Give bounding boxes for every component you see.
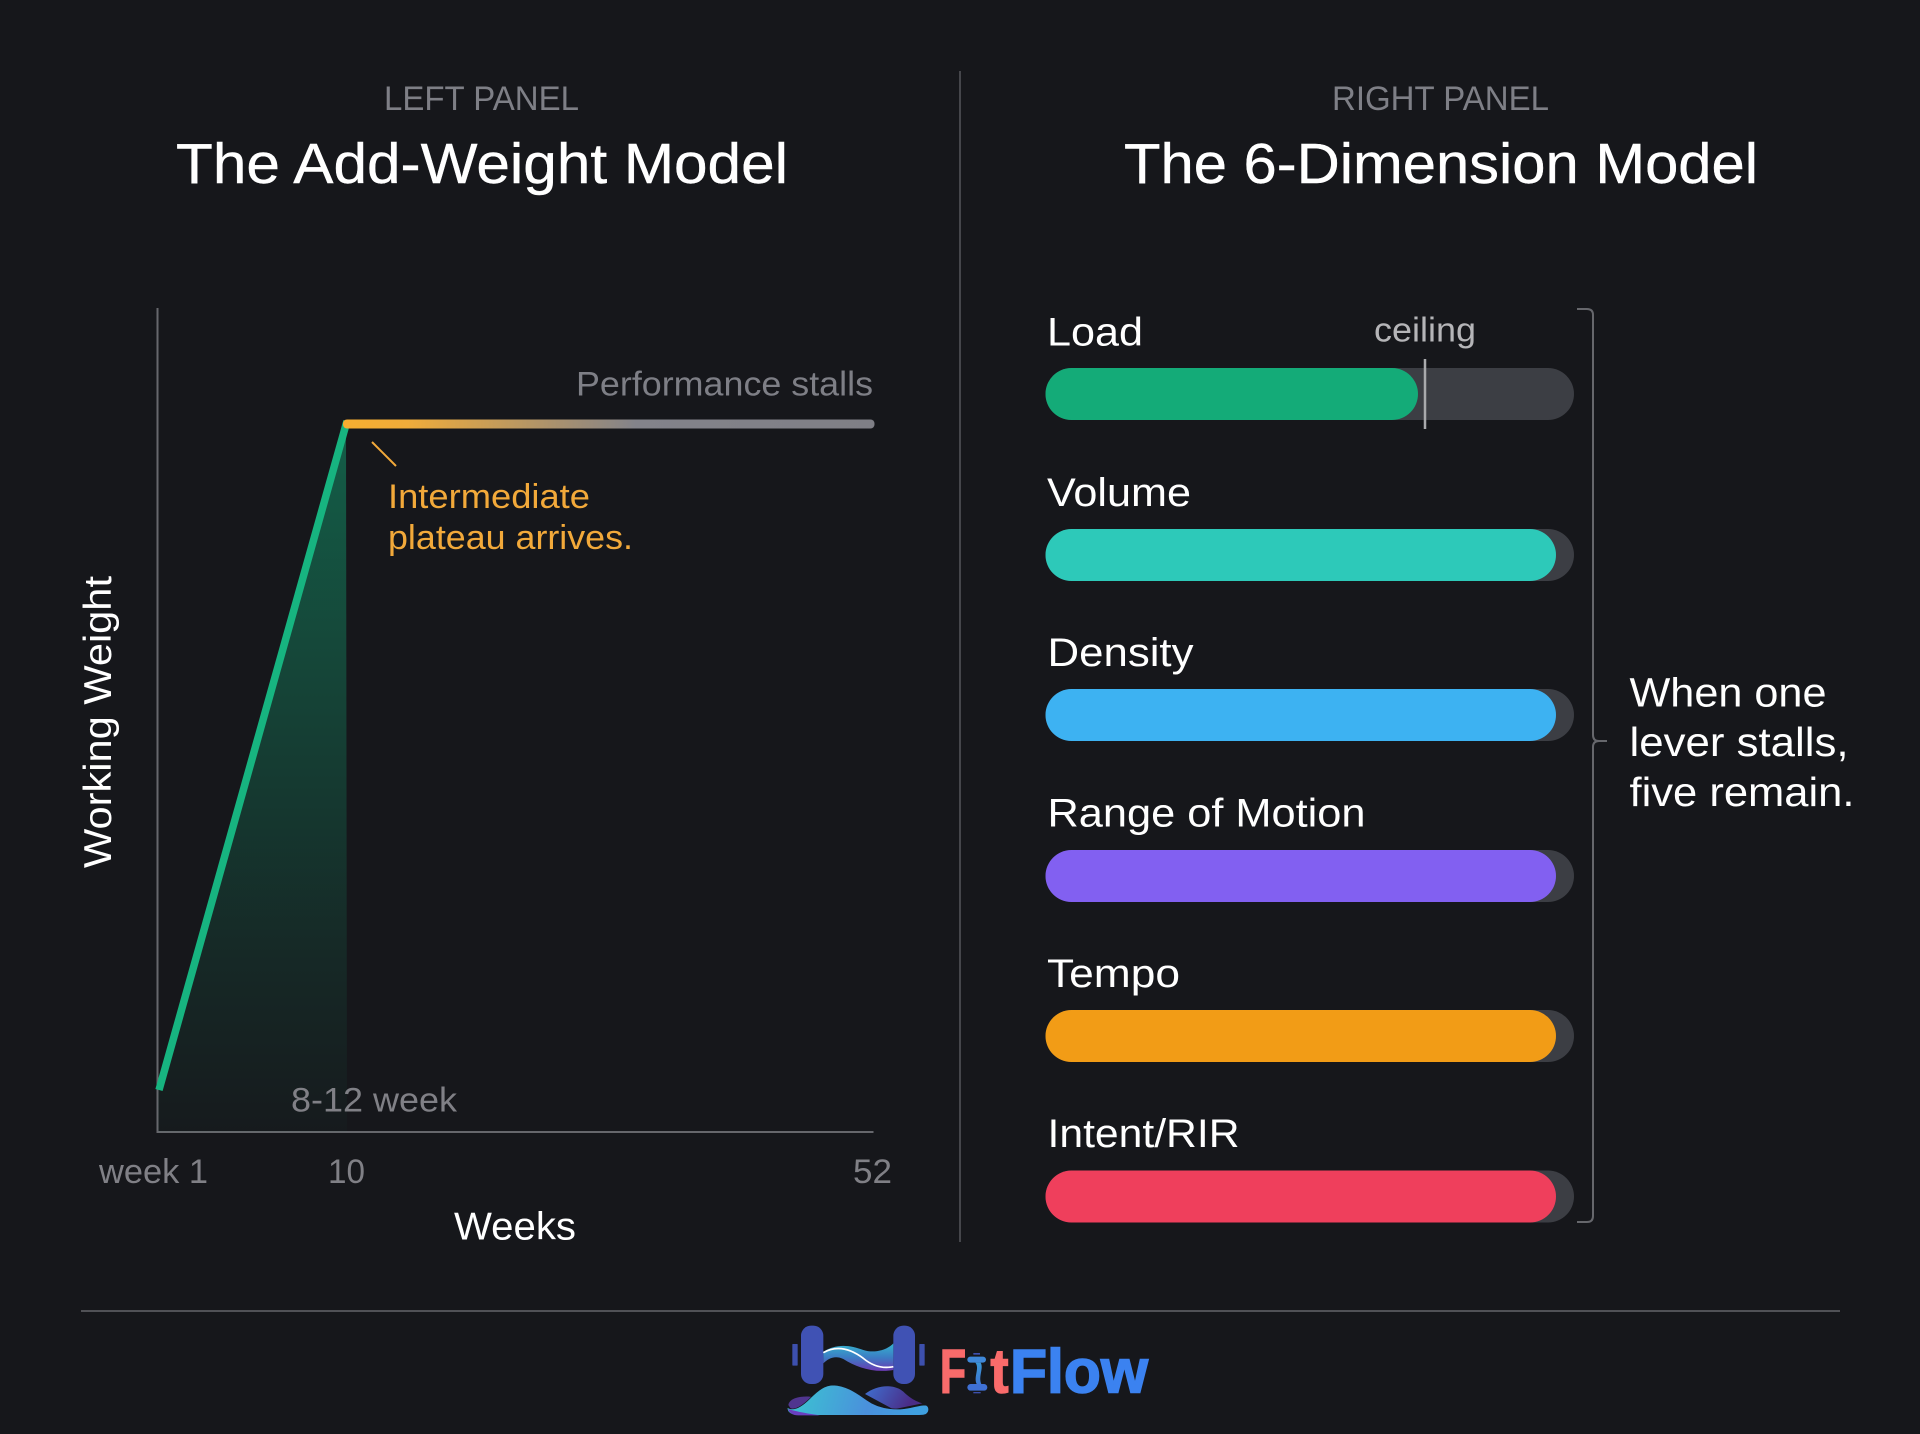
left panel eyebrow: LEFT PANEL (384, 80, 579, 118)
bar: density (1046, 631, 1574, 741)
tempo track (1046, 1010, 1574, 1062)
brace grouping the six bars (1577, 309, 1607, 1222)
wordmark (940, 1338, 1149, 1406)
tick label: 52: 52 (853, 1153, 892, 1191)
panel divider (959, 71, 961, 1242)
purple hill corner (788, 1409, 820, 1415)
line chart: working weight over weeks (77, 308, 892, 1248)
callout: when one lever stalls: lever stalls, (1630, 719, 1848, 765)
bar: intent/RIR (1046, 1112, 1574, 1222)
left panel heading: The Add-Weight Model (176, 132, 788, 196)
tick label: 10: 10 (328, 1153, 365, 1191)
right panel eyebrow: RIGHT PANEL (1332, 80, 1549, 118)
left purple hump (788, 1396, 815, 1410)
right outer collar (919, 1344, 925, 1366)
y axis title: Working Weight (77, 576, 120, 868)
footer divider (81, 1310, 1840, 1312)
intent/RIR fill (1046, 1170, 1556, 1222)
right hump (865, 1386, 922, 1409)
white highlight (823, 1348, 893, 1367)
stem (975, 1363, 982, 1384)
letter F: F (940, 1338, 966, 1406)
letter t: t (990, 1338, 1008, 1406)
callout: intermediate plateau (372, 442, 633, 557)
bar: tempo (1046, 952, 1574, 1062)
chart axes (158, 308, 874, 1132)
density track (1046, 689, 1574, 741)
range of motion label: Range of Motion (1048, 792, 1366, 836)
panel: right, the 6-dimension model (1046, 80, 1860, 1222)
intent/RIR track (1046, 1170, 1574, 1222)
ceiling marker (1424, 359, 1426, 429)
density fill (1046, 689, 1556, 741)
bar wave (823, 1343, 893, 1371)
bottom collar (973, 1392, 981, 1393)
icon: dumbbell with wave (787, 1326, 929, 1415)
top collar (973, 1353, 980, 1355)
left outer collar (792, 1344, 798, 1366)
callout: when one lever stalls: When one (1630, 670, 1826, 716)
x axis title: Weeks (454, 1206, 576, 1248)
volume fill (1046, 529, 1556, 581)
callout text: Intermediate (388, 478, 590, 516)
density label: Density (1048, 631, 1194, 675)
bar: load (1046, 310, 1574, 429)
range of motion fill (1046, 850, 1556, 902)
bar: range of motion (1046, 792, 1574, 902)
volume label: Volume (1047, 471, 1191, 515)
logo: FitFlow (787, 1326, 1149, 1415)
load fill (1046, 368, 1418, 420)
blue hill (787, 1385, 929, 1415)
volume track (1046, 529, 1574, 581)
callout tick (372, 442, 396, 466)
right plate (893, 1326, 915, 1384)
shaded area under rise (158, 425, 347, 1132)
Flow: Flow (1010, 1338, 1149, 1406)
plateau line (343, 420, 874, 428)
range of motion track (1046, 850, 1574, 902)
load track (1046, 368, 1574, 420)
top cap (967, 1357, 986, 1363)
tempo fill (1046, 1010, 1556, 1062)
letter i as dumbbell (967, 1353, 987, 1393)
load label: Load (1047, 310, 1143, 354)
8-12 week label: 8-12 week (291, 1082, 458, 1120)
right panel heading: The 6-Dimension Model (1124, 132, 1758, 196)
callout text: plateau arrives. (388, 519, 633, 557)
performance stalls label: Performance stalls (576, 366, 873, 404)
bottom cap (967, 1384, 987, 1391)
panel: left, the add-weight model (77, 80, 892, 1248)
intent/RIR label: Intent/RIR (1048, 1112, 1240, 1156)
callout: when one lever stalls: five remain. (1630, 769, 1854, 815)
bar: volume (1046, 471, 1574, 581)
left plate (801, 1326, 823, 1384)
ceiling label: ceiling (1374, 312, 1476, 350)
green rising line (159, 421, 347, 1090)
tempo label: Tempo (1047, 952, 1180, 996)
tick label: week 1: week 1 (98, 1153, 208, 1191)
